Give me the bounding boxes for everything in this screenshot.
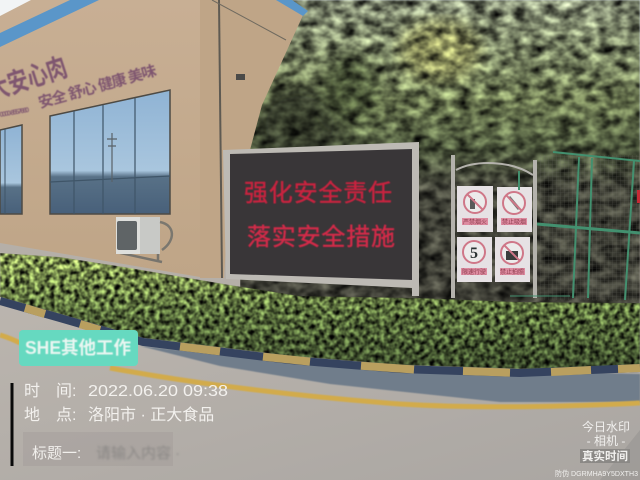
title row: 标题一: [32,445,81,462]
category tag [19,330,138,366]
safety sign: speed limit 5: 5 [470,245,478,262]
location row: 点: [56,406,76,424]
building: roof wire [212,0,286,40]
kerb: yellow segments [25,308,640,373]
safety sign: no fire: 严禁烟火 [463,218,487,226]
LED board: screen [230,149,412,280]
air conditioner: pipe [160,222,172,250]
air conditioner: side panel [140,217,160,254]
air conditioner: body [116,217,160,254]
sign stand: right post [533,160,537,298]
fence mesh [540,155,640,300]
safety sign: speed limit 5 [457,237,492,282]
window: reflected pole [107,133,117,182]
LED board: steel frame [223,142,419,296]
wall sign: values: 安全 舒心 健康 美味 [36,62,159,112]
LED board: line two: 落实安全措施 [247,224,395,251]
safety sign: no smoking: 禁止吸烟 [502,218,526,226]
road: shadow band [140,346,640,402]
red flag fragment [637,190,640,203]
watermark logo: - 相机 - [587,434,625,448]
safety sign: no smoking [497,187,532,232]
time row [24,382,228,400]
striped kerb [0,301,640,373]
LED board: line one: 强化安全责任 [244,180,392,207]
building: side wall [200,0,304,278]
road: yellow line [0,335,640,407]
wall sign lettering [0,52,159,119]
time row: 时 [24,382,40,400]
air conditioner unit [116,217,172,262]
sign stand: arch [456,163,533,175]
sky [0,0,640,140]
building: camera [236,74,245,80]
air conditioner: fan grille [117,221,137,250]
road: bottom right shade [600,430,640,480]
safety sign: no fire [457,186,493,232]
location row: 地 [24,406,40,424]
time row: 2022.06.20 09:38 [88,383,228,400]
building [0,0,308,278]
title row [23,432,180,466]
title row: 请输入内容 · [96,445,180,462]
bamboo foliage [240,0,640,310]
building: cable [219,0,222,278]
windows [0,90,170,214]
window: main [50,90,170,214]
hedge [0,253,640,369]
air conditioner: bracket [116,222,162,262]
kerb: dark base [0,301,640,373]
window: main mullions [50,98,170,214]
location row: 洛阳市 · 正大食品 [88,406,214,424]
window: left [0,125,22,214]
watermark logo: 今日水印 [582,419,630,434]
building: side wall blue trim [276,0,308,16]
safety sign: no entry: 禁止拍照 [500,268,524,276]
watermark logo: 真实时间 [582,449,628,463]
category tag: SHE其他工作 [25,338,131,358]
location row [24,406,214,424]
watermark logo [580,419,630,463]
building: sky corner [0,0,31,16]
safety sign: speed limit 5: 限速行驶 [462,268,486,276]
time row: 间: [56,382,76,400]
LED sign board [223,142,419,296]
window: left mullion [4,129,6,214]
info accent bar [10,383,14,466]
road [0,300,640,480]
green fence [510,152,640,300]
sign stand: left post [451,155,455,298]
safety sign stand [451,155,537,298]
building: blue stripe [0,0,99,47]
wall sign: phone number: 0000-8557660 [0,107,30,119]
building: front wall [0,0,200,277]
safety sign: no entry [495,237,530,282]
